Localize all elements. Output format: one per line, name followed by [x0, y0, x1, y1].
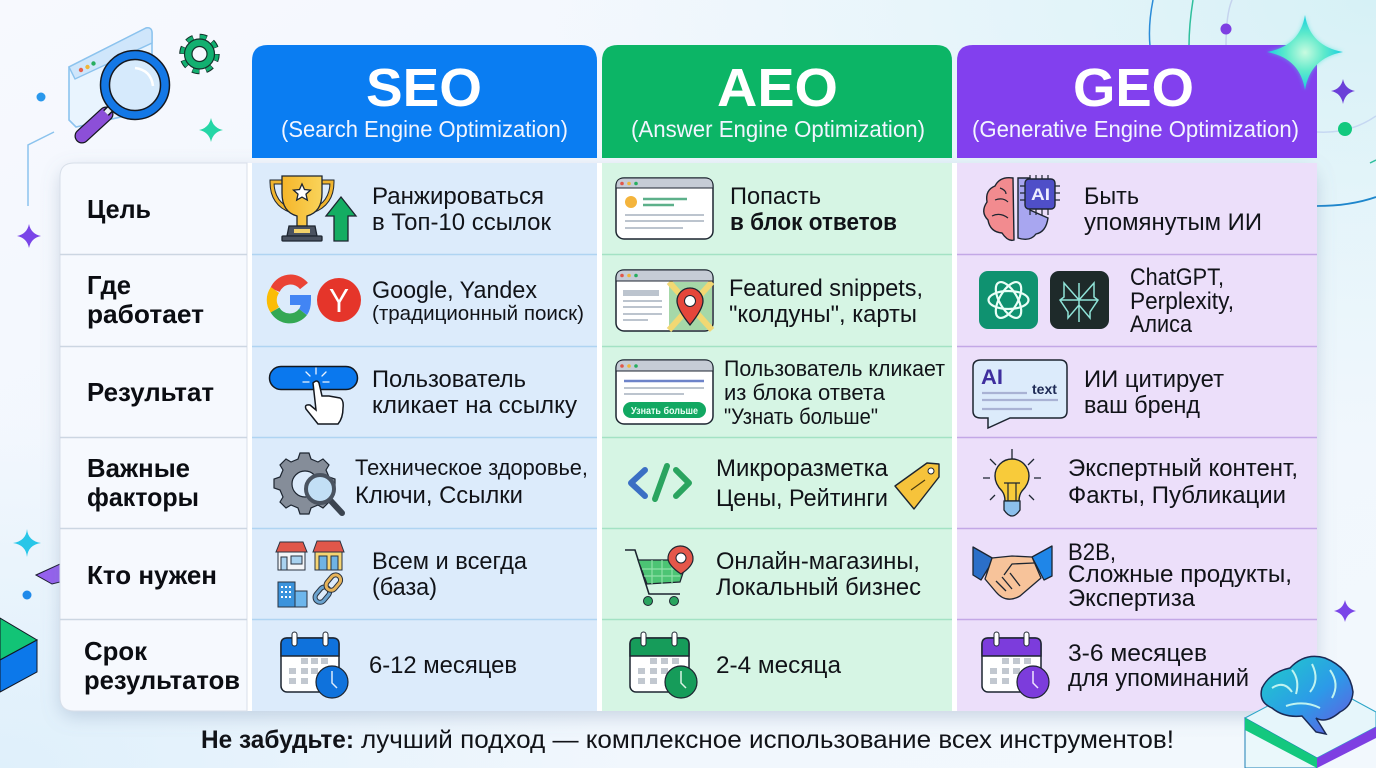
panel: row labels column — [60, 163, 247, 711]
AEO row texts: Цены, Рейтинги — [716, 485, 888, 512]
blue dot lower — [22, 590, 32, 600]
GEO row texts — [1068, 183, 1298, 692]
GEO row texts: Perplexity, — [1130, 288, 1234, 315]
purple dot — [1220, 24, 1232, 34]
icon: teal star top right — [1267, 15, 1343, 90]
label: goal: Цель — [87, 194, 151, 224]
decorative orbit arcs top right — [1149, 0, 1376, 206]
panel: table shadow base — [60, 163, 1317, 711]
label: where it works — [87, 270, 204, 329]
SEO row texts: кликает на ссылку — [372, 392, 577, 419]
AEO header — [602, 45, 952, 158]
GEO row texts: Алиса — [1130, 311, 1193, 338]
panel: GEO column — [957, 45, 1317, 711]
icon: cyan sparkle — [13, 529, 41, 557]
icon: calendar blue — [281, 632, 348, 698]
GEO row texts: ChatGPT, — [1130, 264, 1224, 291]
icon: purple sparkle right — [1331, 79, 1355, 104]
label: time to results: результатов — [84, 665, 240, 695]
footer note: лучший подход — комплексное использование всех инструментов! — [361, 726, 1174, 754]
SEO row texts: в Топ-10 ссылок — [372, 209, 551, 236]
label: where it works: Где — [87, 270, 131, 300]
AEO row texts: "Узнать больше" — [724, 404, 878, 429]
icon: handshake — [973, 546, 1052, 599]
AEO header: AEO — [717, 58, 838, 118]
SEO row texts — [355, 183, 588, 679]
GEO row texts: 3-6 месяцев — [1068, 640, 1207, 667]
SEO header: (Search Engine Optimization) — [281, 116, 568, 142]
label: where it works: работает — [87, 299, 204, 329]
icon: calendar purple — [982, 632, 1049, 698]
GEO row texts: упомянутым ИИ — [1084, 209, 1262, 236]
AEO row texts — [716, 183, 945, 679]
icon: mint sparkle — [199, 118, 223, 142]
icon: isometric block left — [0, 618, 37, 692]
icon: purple sparkle left — [17, 224, 41, 248]
icon: code brackets — [631, 466, 689, 499]
GEO row texts: Экспертный контент, — [1068, 455, 1298, 482]
icon: snippet with map — [616, 270, 713, 331]
SEO row texts: 6-12 месяцев — [369, 652, 517, 679]
SEO row texts: Ранжироваться — [372, 183, 544, 210]
AEO row texts: Локальный бизнес — [716, 574, 921, 601]
icon: light bulb — [983, 449, 1041, 516]
connector line — [28, 132, 54, 206]
label: important factors — [87, 453, 199, 512]
icon: brain on platform — [1245, 656, 1376, 768]
SEO row texts: (база) — [372, 574, 437, 601]
SEO row texts: Google, Yandex — [372, 277, 537, 304]
icon: Yandex logo — [317, 278, 361, 322]
AEO row texts: из блока ответа — [724, 380, 886, 405]
icon: brain with AI chip: AI — [1031, 185, 1050, 204]
GEO row texts: ваш бренд — [1084, 392, 1200, 419]
icon: trophy with arrow — [272, 176, 356, 241]
label: important factors: факторы — [87, 482, 199, 512]
GEO row texts: B2B, — [1068, 539, 1116, 566]
SEO header — [252, 45, 597, 158]
panel: AEO column — [602, 45, 952, 711]
GEO row texts: ИИ цитирует — [1084, 366, 1224, 393]
GEO row texts: Факты, Публикации — [1068, 482, 1286, 509]
label: who needs it: Кто нужен — [87, 560, 217, 590]
label: time to results — [84, 636, 240, 695]
AEO row texts: Featured snippets, — [729, 275, 923, 302]
footer note: Не забудьте: — [201, 726, 354, 754]
label: time to results: Срок — [84, 636, 148, 666]
SEO row texts: Ключи, Ссылки — [355, 482, 523, 509]
label: important factors: Важные — [87, 453, 190, 483]
icon: window with button — [616, 360, 713, 424]
icon: AI text speech bubble — [973, 360, 1067, 428]
GEO header: GEO — [1073, 58, 1194, 118]
panel: SEO column — [252, 45, 597, 711]
icon: AI text speech bubble: AI — [981, 366, 1003, 389]
icon: brain with AI chip — [984, 175, 1060, 240]
icon: Google logo — [272, 280, 306, 318]
blue dot — [36, 92, 46, 102]
GEO row texts: Сложные продукты, — [1068, 561, 1292, 588]
green dot — [1338, 122, 1352, 136]
AEO row texts: Микроразметка — [716, 455, 889, 482]
icon: cart with pin — [625, 546, 693, 606]
icon: Perplexity tile — [1050, 271, 1109, 329]
icon: shops, building and link — [276, 541, 344, 607]
icon: AI text speech bubble: text — [1032, 381, 1057, 397]
purple diamond — [36, 564, 60, 584]
AEO row texts: 2-4 месяца — [716, 652, 842, 679]
GEO header: (Generative Engine Optimization) — [972, 116, 1299, 142]
GEO row texts: Быть — [1084, 183, 1139, 210]
GEO header — [957, 45, 1317, 158]
icon: click button — [270, 366, 358, 424]
AEO row texts: Пользователь кликает — [724, 356, 945, 381]
GEO row texts: Экспертиза — [1068, 585, 1196, 612]
label: result: Результат — [87, 377, 214, 407]
AEO header: (Answer Engine Optimization) — [631, 116, 925, 142]
AEO row texts: "колдуны", карты — [729, 301, 917, 328]
SEO row texts: Техническое здоровье, — [355, 455, 588, 480]
icon: window with button: Узнать больше — [631, 405, 698, 417]
icon: calendar green — [630, 632, 697, 698]
AEO row texts: Онлайн-магазины, — [716, 548, 920, 575]
SEO row texts: (традиционный поиск) — [372, 303, 584, 325]
SEO row texts: Пользователь — [372, 366, 526, 393]
AEO row texts: Попасть — [730, 183, 821, 210]
icon: ChatGPT tile — [979, 271, 1038, 329]
AEO row texts: в блок ответов — [730, 209, 897, 236]
icon: purple sparkle lower right — [1334, 600, 1356, 622]
SEO header: SEO — [366, 58, 482, 118]
icon: green gear — [182, 37, 216, 71]
icon: answer block window — [616, 178, 713, 239]
icon: price tag — [895, 463, 939, 509]
GEO row texts: для упоминаний — [1068, 665, 1249, 692]
icon: search illustration top left — [69, 28, 170, 136]
icon: gear with magnifier — [274, 453, 342, 514]
SEO row texts: Всем и всегда — [372, 548, 528, 575]
icon: Yandex logo: Y — [329, 282, 349, 319]
